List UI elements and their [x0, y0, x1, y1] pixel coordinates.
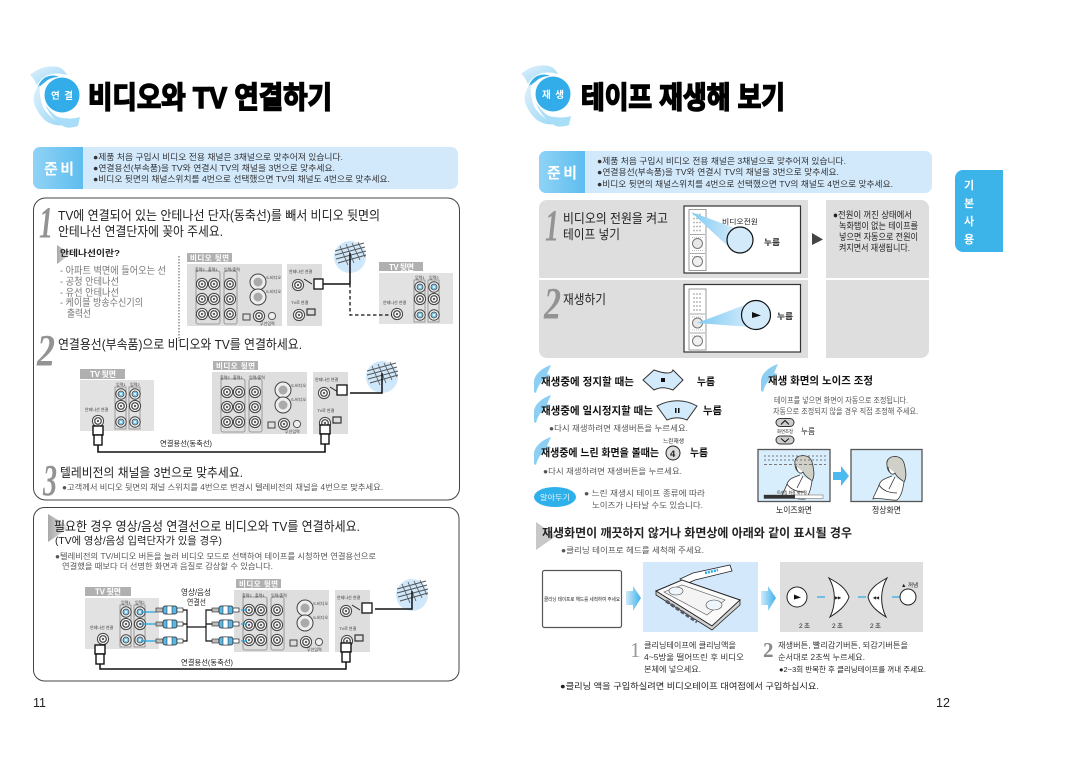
step: cleaning 1: 1: [630, 638, 640, 662]
panel: playback step 1: 누름: [764, 238, 781, 247]
panel: button sequence: ▸▸: [834, 596, 842, 602]
heading: unclear picture: 재생화면이 깨끗하지 않거나 화면상에 아래와 같이 표시될 경우: [542, 525, 852, 540]
diagram: AV connection: 연결선: [187, 597, 206, 607]
step 1 text: TV에 연결되어 있는 안테나선 단자(동축선)를 빼서 비디오 뒷면의: [58, 208, 380, 223]
diagram: coax connection: 비디오 뒷면: [216, 360, 255, 370]
diagram: AV connection: 출력1: [255, 592, 265, 598]
panel: button sequence: 2초: [799, 622, 810, 630]
title: 테이프 재생해 보기: 테이프 재생해 보기: [581, 82, 785, 115]
diagram: coax connection: 입력1: [116, 381, 126, 387]
step: cleaning 1: 4~5방울 떨어뜨린 후 비디오: [644, 652, 744, 662]
note: head cleaning: ●클리닝 테이프로 헤드를 세척해 주세요.: [561, 545, 704, 555]
panel: empty grey block: [826, 280, 929, 358]
step 3 number: 3: [42, 456, 57, 505]
step 2 number: 2: [36, 326, 55, 375]
panel: 준비 left: ●제품 처음 구입시 비디오 전용 채널은 3채널으로 맞추어져 있습니다.: [93, 152, 343, 162]
side tab: 기본사용: 사: [964, 215, 974, 228]
icon: section badge 재생: 재 생: [542, 89, 564, 101]
panel: auto power note: 녹화탭이 없는 테이프를: [839, 220, 918, 231]
arrow: screen to cassette: [626, 586, 641, 611]
panel: 준비 right: ●제품 처음 구입시 비디오 전용 채널은 3채널으로 맞추어져 있습니다.: [597, 156, 846, 166]
diagram: antenna connection: S-비디오: [266, 288, 281, 294]
diagram: antenna connection: 입력2: [429, 274, 439, 280]
instruction: slow: 재생중에 느린 화면을 볼때는: [541, 446, 659, 459]
screen: noisy picture: [758, 450, 830, 502]
step: cleaning 2: ●2~3회 반복한 후 클리닝테이프를 꺼내 주세요.: [779, 664, 926, 674]
panel: playback step 1: 1: [545, 201, 559, 250]
screen: cleaning message: 클리닝 테이프로 헤드를 세척하여 주세요: [544, 596, 620, 603]
panel: playback step 2: 재생하기: [563, 292, 606, 307]
step: cleaning 1: [630, 638, 744, 674]
panel: optional AV connection: [34, 508, 459, 681]
heading: 필요한 경우 영상/음성 연결선으로 비디오와 TV를 연결하세요.: [54, 519, 360, 534]
callout: 알아두기: 알아두기: [540, 492, 570, 502]
diagram: coax connection: 안테나선 연결: [85, 406, 109, 412]
panel: playback step 2: [539, 279, 808, 358]
sub-heading: (TV에 영상/음성 입력단자가 있을 경우): [55, 534, 222, 547]
antenna wire definition: 출력선: [67, 308, 91, 320]
icon: section badge 연결: [30, 66, 80, 128]
panel: 준비 left: ●연결용선(부속품)을 TV와 연결시 TV의 채널을 3번으로 맞추세요.: [93, 163, 335, 173]
diagram: AV connection: S-비디오: [313, 600, 328, 606]
panel: 준비 left: ●비디오 뒷면의 채널스위치를 4번으로 선택했으면 TV의 채널도 4번으로 맞추세요.: [93, 174, 390, 184]
callout: 알아두기: ● 느린 재생시 테이프 종류에 따라: [584, 488, 706, 498]
panel: 준비 right: ●비디오 뒷면의 채널스위치를 4번으로 선택했으면 TV의 채널도 4번으로 맞추세요.: [597, 179, 893, 189]
panel: button sequence: 2초: [832, 622, 843, 630]
screen: noisy picture: 트래킹 화질 재수정: [777, 490, 808, 495]
page number 11: 11: [33, 696, 46, 710]
side tab: 기본사용: [955, 170, 1003, 252]
antenna wire definition: [57, 245, 166, 320]
step 3 note: ●고객께서 비디오 뒷면의 채널 스위치를 4번으로 변경시 텔레비전의 채널을 4번으로 맞추세요.: [62, 482, 383, 492]
panel: auto power note: ●전원이 꺼진 상태에서: [833, 210, 912, 220]
panel: connection steps 1-3: [34, 198, 460, 505]
diagram: coax connection: 무선입력: [285, 428, 300, 434]
screen: normal picture: [851, 450, 922, 502]
caption: noisy picture: 노이즈화면: [776, 505, 812, 515]
diagram: antenna connection: 출력2: [195, 266, 205, 272]
diagram: antenna connection: 무선입력: [260, 320, 275, 326]
antenna wire definition: - 케이블 방송수신기의: [60, 297, 143, 309]
side tab: 기본사용: 용: [964, 233, 974, 246]
diagram: AV connection: [85, 578, 428, 669]
instruction: slow: [534, 437, 708, 465]
panel: playback step 1: 테이프 넣기: [563, 227, 620, 242]
note: resume after pause: ●다시 재생하려면 재생버튼을 누르세요.: [549, 423, 688, 433]
diagram: AV connection: S-비디오: [313, 614, 328, 620]
panel: 준비 right: [539, 151, 932, 193]
instruction: stop: 재생중에 정지할 때는: [541, 375, 634, 388]
arrow: noisy to normal: [833, 466, 849, 486]
diagram: antenna connection: 안테나선 연결: [383, 299, 407, 305]
instruction: slow: 4: [670, 449, 676, 460]
diagram: AV connection: 연결용선(동축선): [181, 657, 233, 667]
instruction: stop: 누름: [697, 376, 715, 388]
diagram: coax connection: 연결용선(동축선): [160, 438, 212, 448]
note: ●텔레비전의 TV/비디오 버튼을 눌러 비디오 모드로 선택하여 테이프를 시청하면 연결용선으로: [55, 551, 376, 561]
diagram: coax connection: 안테나선 연결: [315, 376, 339, 382]
diagram: coax connection: 입력/출력: [249, 374, 265, 380]
diagram: AV connection: 안테나선 연결: [337, 594, 361, 600]
diagram: antenna connection: S-비디오: [266, 274, 281, 280]
instruction: slow: 느린재생: [663, 437, 684, 445]
section: noise adjustment: [761, 364, 918, 444]
step: cleaning 1: 클리닝테이프에 클리닝액을: [644, 640, 736, 650]
note: resume after slow: ●다시 재생하려면 재생버튼을 누르세요.: [543, 466, 682, 476]
panel: 준비 right: 준 비: [547, 165, 577, 182]
diagram: antenna connection: 비디오 뒷면: [190, 252, 229, 262]
section: noise adjustment: 테이프를 넣으면 화면이 자동으로 조정됩니다.: [774, 395, 908, 405]
step 2 text: 연결용선(부속품)으로 비디오와 TV를 연결하세요.: [58, 337, 302, 352]
icon: section badge 재생: [521, 65, 571, 127]
heading: unclear picture: [536, 522, 852, 550]
panel: button sequence: [780, 562, 923, 632]
diagram: AV connection: 안테나선 연결: [90, 624, 114, 630]
panel: playback step 1: 비디오의 전원을 켜고: [563, 211, 668, 226]
instruction: pause: 누름: [703, 405, 722, 417]
panel: button sequence: ◂◂: [872, 596, 880, 602]
panel: playback step 2: 2: [543, 279, 561, 328]
panel: playback step 2: 누름: [777, 312, 794, 321]
diagram: antenna connection: 입력/출력: [224, 266, 240, 272]
panel: button sequence: ▲ 꺼냄: [901, 581, 918, 589]
step: cleaning 1: 본체에 넣으세요.: [644, 664, 701, 674]
panel: 준비 left: 준 비: [44, 161, 74, 178]
diagram: AV connection: 입력1: [121, 599, 131, 605]
step: cleaning 2: 재생버튼, 빨리감기버튼, 되감기버튼을: [778, 640, 908, 650]
diagram: coax connection: 출력1: [233, 374, 243, 380]
panel: playback step 1: 비디오전원: [722, 217, 758, 226]
diagram: AV connection: 비디오 뒷면: [239, 578, 278, 588]
instruction: pause: [534, 395, 722, 423]
antenna wire definition: - 공청 안테나선: [60, 276, 119, 288]
diagram: coax connection: 출력2: [220, 374, 230, 380]
diagram: AV connection: 출력2: [242, 592, 252, 598]
diagram: antenna connection: 입력1: [415, 274, 425, 280]
diagram: coax connection: S-비디오: [291, 396, 306, 402]
diagram: coax connection: S-비디오: [291, 382, 306, 388]
section: noise adjustment: 화면조정: [777, 428, 793, 435]
icon: section badge 연결: 연 결: [51, 90, 73, 102]
side tab: 기본사용: 기: [964, 178, 974, 192]
diagram: coax connection: TV 뒷면: [90, 369, 116, 379]
section: noise adjustment: 재생 화면의 노이즈 조정: [768, 374, 873, 387]
diagram: AV connection: 무선입력: [307, 646, 322, 652]
title: 비디오와 TV 연결하기: 비디오와 TV 연결하기: [88, 82, 332, 115]
callout: 알아두기: 노이즈가 나타날 수도 있습니다.: [592, 500, 703, 510]
side tab: 기본사용: 본: [964, 197, 974, 210]
panel: auto power note: [826, 200, 929, 278]
note: where to buy: ●클리닝 액을 구입하실려면 비디오테이프 대여점에서 구입하십시요.: [560, 681, 819, 691]
panel: 준비 left: [33, 147, 458, 189]
diagram: antenna connection: 출력1: [208, 266, 218, 272]
diagram: antenna connection: TV로 연결: [291, 299, 309, 305]
section: noise adjustment: 자동으로 조정되지 않을 경우 직접 조정해 주세요.: [773, 406, 918, 416]
arrow: step 1 to note: [812, 233, 823, 245]
diagram: antenna connection: 안테나선 연결: [289, 268, 313, 274]
illustration: cleaning tape: [643, 562, 758, 632]
antenna wire definition: 안테나선이란?: [60, 248, 120, 258]
diagram: antenna connection: TV 뒷면: [389, 262, 414, 272]
diagram: AV connection: 입력/출력: [271, 592, 287, 598]
panel: auto power note: 켜지면서 재생됩니다.: [839, 243, 910, 253]
diagram: AV connection: TV로 연결: [339, 625, 357, 631]
step 1 text: 안테나선 연결단자에 꽂아 주세요.: [58, 224, 223, 239]
step 3 text: 텔레비전의 채널을 3번으로 맞추세요.: [60, 466, 243, 480]
callout: 알아두기: [534, 487, 706, 510]
panel: optional AV connection: 연결했을 때보다 더 선명한 화면과 음질로 감상할 수 있습니다.: [62, 561, 273, 571]
diagram: coax connection: TV로 연결: [317, 407, 335, 413]
diagram: AV connection: 입력2: [135, 599, 145, 605]
antenna wire definition: - 유선 안테나선: [60, 287, 119, 299]
step: cleaning 2: [763, 638, 926, 674]
diagram: coax connection: 입력2: [130, 381, 140, 387]
page number 12: 12: [936, 696, 950, 710]
step: cleaning 2: 순서대로 2초씩 누르세요.: [778, 652, 865, 662]
instruction: pause: 재생중에 일시정지할 때는: [541, 404, 653, 417]
panel: playback step 1: [539, 200, 808, 278]
instruction: slow: 누름: [690, 447, 708, 459]
caption: normal picture: 정상화면: [872, 505, 901, 515]
step 1 number: 1: [39, 198, 53, 247]
diagram: antenna connection: [187, 241, 453, 326]
diagram: AV connection: TV 뒷면: [95, 586, 121, 596]
arrow: cassette to buttons: [761, 586, 776, 611]
step: cleaning 2: 2: [763, 638, 774, 662]
section: noise adjustment: 누름: [801, 427, 815, 436]
panel: auto power note: 넣으면 자동으로 전원이: [839, 232, 918, 242]
diagram: coax connection: [80, 360, 398, 452]
panel: button sequence: 2초: [870, 622, 881, 630]
diagram: AV connection: 영상/음성: [181, 587, 211, 597]
instruction: stop: [534, 365, 715, 393]
antenna wire definition: - 아파트 벽면에 들어오는 선: [60, 265, 166, 277]
panel: 준비 right: ●연결용선(부속품)을 TV와 연결시 TV의 채널을 3번으로 맞추세요.: [597, 167, 839, 177]
screen: cleaning message: [542, 570, 622, 628]
